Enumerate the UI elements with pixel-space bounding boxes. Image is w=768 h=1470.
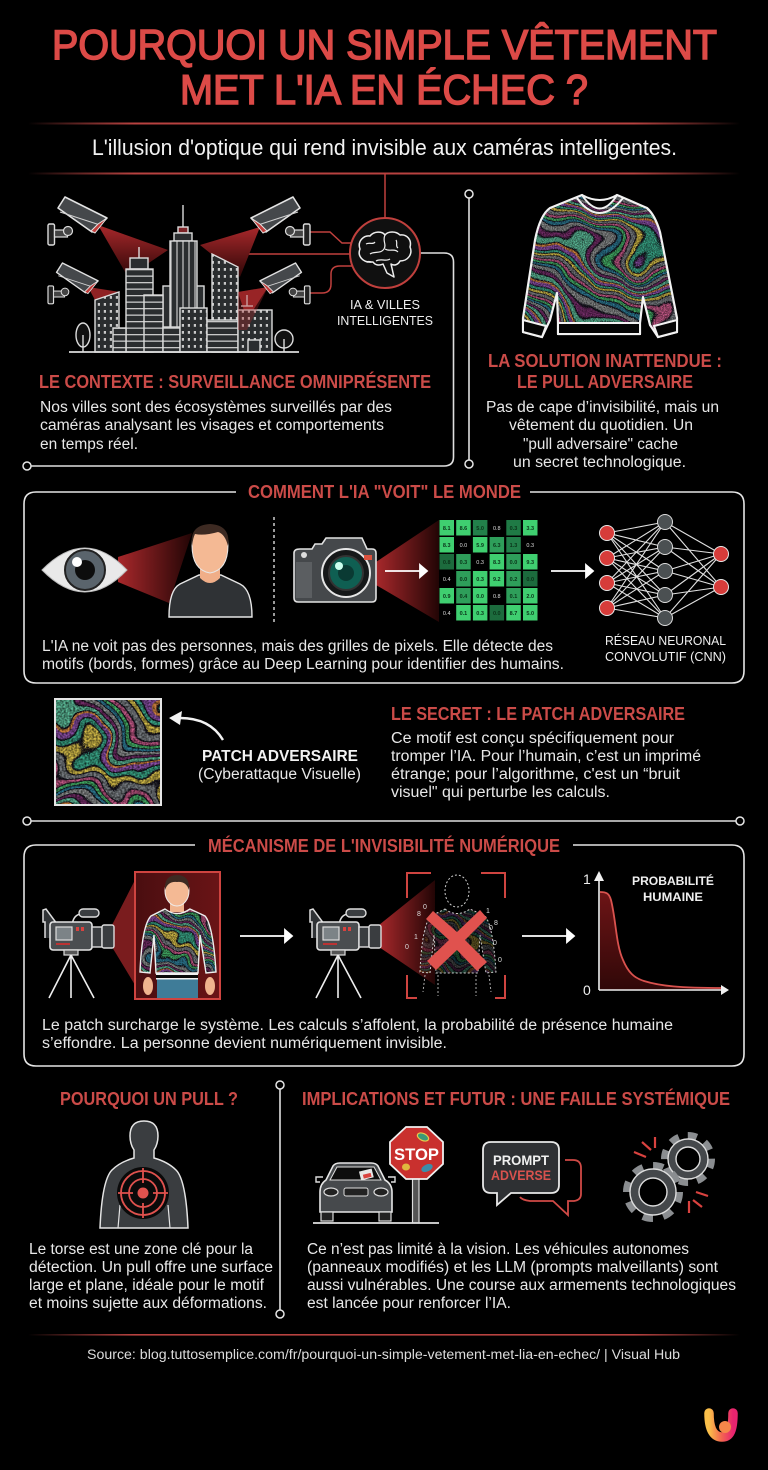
chart: pixel grid: 0.3	[476, 560, 484, 566]
source footer: Source: blog.tuttosemplice.com/fr/pourquoi-un-simple-vetement-met-lia-en-echec/ | Visual Hub	[87, 1347, 680, 1362]
chart: human probability: HUMAINE	[643, 890, 703, 904]
red connectors	[218, 173, 385, 293]
text: Ce motif est conçu spécifiquement pour	[391, 730, 674, 747]
icon: cctv bottom left	[48, 263, 98, 304]
title: POURQUOI UN SIMPLE VÊTEMENT	[52, 21, 717, 68]
chart: pixel grid: 0.4	[443, 611, 451, 617]
chart: pixel grid: 0.4	[460, 594, 468, 600]
chart: pixel grid: 5.0	[526, 611, 534, 617]
icon: cctv top right	[251, 197, 310, 245]
beam	[379, 880, 435, 985]
scene: invisible person: 1	[486, 908, 490, 915]
scene: invisible person: 0	[405, 944, 409, 951]
text: et moins sujette aux déformations.	[29, 1295, 267, 1312]
heading: COMMENT L'IA "VOIT" LE MONDE	[248, 482, 521, 502]
icon: city skyline	[69, 205, 299, 352]
chart: pixel grid: 0.2	[510, 577, 517, 583]
text: Ce n’est pas limité à la vision. Les véhicules autonomes	[307, 1241, 689, 1258]
scene: invisible person	[405, 873, 510, 998]
label: patch	[198, 748, 361, 783]
label: IA et villes intelligentes	[337, 297, 433, 328]
panel frame	[24, 492, 744, 683]
chart: pixel grid: 0.0	[476, 594, 484, 600]
camera beam	[376, 520, 439, 622]
title	[52, 21, 717, 113]
text: est lancée pour renforcer l’IA.	[307, 1295, 511, 1312]
label: CNN: CONVOLUTIF (CNN)	[605, 649, 726, 664]
arrow: curved	[169, 711, 223, 740]
chart: human probability: PROBABILITÉ	[632, 873, 714, 888]
heading: context: LE CONTEXTE : SURVEILLANCE OMNIPRÉSENTE	[39, 371, 431, 392]
heading: MÉCANISME DE L'INVISIBILITÉ NUMÉRIQUE	[208, 835, 560, 856]
text: context: Nos villes sont des écosystèmes surveillés par des	[40, 399, 392, 416]
chart: human probability: 0	[583, 982, 591, 998]
scene: invisible person: 0	[498, 957, 502, 964]
text: context: caméras analysant les visages et comportements	[40, 417, 384, 434]
text	[29, 1241, 273, 1312]
label: IA et villes intelligentes: INTELLIGENTES	[337, 313, 433, 328]
text: Le torse est une zone clé pour la	[29, 1241, 253, 1258]
text: Le patch surcharge le système. Les calculs s’affolent, la probabilité de présence humaine	[42, 1017, 673, 1034]
chart: human probability	[583, 871, 729, 998]
text: context: en temps réel.	[40, 436, 138, 453]
text: how AI sees: L'IA ne voit pas des personnes, mais des grilles de pixels. Elle détecte des	[42, 638, 553, 655]
icon: logo	[709, 1413, 733, 1437]
label: patch: PATCH ADVERSAIRE	[202, 748, 358, 765]
chart: pixel grid: 0.0	[510, 560, 517, 566]
icon: camera	[294, 538, 376, 602]
chart: pixel grid: 0.4	[443, 577, 451, 583]
chart: pixel grid: 9.2	[493, 577, 501, 583]
panel: how AI sees	[24, 482, 744, 683]
panel: secret patch	[54, 698, 700, 806]
text: aussi vulnérables. Une course aux armements technologiques	[307, 1277, 736, 1294]
chart: pixel grid: 0.0	[526, 577, 534, 583]
icon: gears	[627, 1136, 711, 1218]
divider dotted	[273, 517, 275, 625]
chart: pixel grid: 0.8	[493, 594, 501, 600]
text: solution: vêtement du quotidien. Un	[509, 417, 693, 434]
text: how AI sees: motifs (bords, formes) grâce au Deep Learning pour identifier des humains.	[42, 656, 564, 673]
label: CNN: RÉSEAU NEURONAL	[605, 633, 726, 648]
chart: pixel grid: 9.3	[526, 560, 534, 566]
chart: human probability: 1	[583, 871, 591, 887]
vertical connector	[276, 1081, 284, 1318]
arrow	[551, 565, 593, 577]
icon: prompt bubbles: ADVERSE	[491, 1167, 551, 1183]
scene: person in sweater	[134, 871, 221, 1000]
text: solution	[486, 399, 719, 471]
icon: prompt bubbles: PROMPT	[493, 1152, 549, 1168]
panel: solution	[487, 194, 720, 470]
chart: pixel grid: 0.8	[493, 526, 501, 532]
scene: invisible person: 1	[414, 934, 418, 941]
chart: pixel grid: 6.3	[493, 543, 501, 549]
subtitle: L'illusion d'optique qui rend invisible aux caméras intelligentes.	[92, 135, 677, 160]
surveillance beams	[88, 225, 268, 320]
arrow	[240, 930, 292, 942]
text	[307, 1241, 736, 1312]
text: détection. Un pull offre une surface	[29, 1259, 273, 1276]
chart: pixel grid: 2.0	[526, 594, 534, 600]
text: large et plane, idéale pour le motif	[29, 1277, 265, 1294]
text: solution: "pull adversaire" cache	[523, 436, 678, 453]
chart: pixel grid: 8.3	[493, 560, 501, 566]
chart: pixel grid	[440, 520, 538, 620]
chart: pixel grid: 5.9	[476, 543, 484, 549]
panel: why a sweater	[29, 1089, 273, 1312]
scene: invisible person: 0	[423, 904, 427, 911]
text: how AI sees	[42, 638, 564, 673]
beam	[112, 880, 135, 985]
chart: pixel grid: 8.3	[443, 543, 451, 549]
panel frame	[24, 845, 744, 1066]
chart: pixel grid: 0.3	[526, 543, 534, 549]
divider	[23, 817, 744, 825]
beam overlay on buildings	[238, 287, 268, 330]
icon: brain	[350, 218, 420, 288]
label: IA et villes intelligentes: IA & VILLES	[350, 297, 420, 312]
arrow	[385, 565, 427, 577]
scene: invisible person: 8	[417, 911, 421, 918]
connector frame	[31, 253, 454, 466]
chart: pixel grid: 8.7	[510, 611, 517, 617]
chart: pixel grid: 0.8	[443, 560, 451, 566]
label: CNN	[605, 633, 726, 664]
chart: pixel grid: 0.3	[476, 611, 484, 617]
sight beam	[118, 533, 192, 603]
chart: pixel grid: 0.3	[510, 526, 517, 532]
text: étrange; pour l’algorithme, c'est un “bruit	[391, 766, 681, 783]
scene: invisible person: 0	[489, 925, 493, 932]
chart: pixel grid: 8.1	[443, 526, 451, 532]
icon: person	[169, 524, 252, 617]
text: tromper l’IA. Pour l’humain, c’est un imprimé	[391, 748, 701, 765]
chart: pixel grid: 0.9	[443, 594, 451, 600]
chart: pixel grid: 0.1	[510, 594, 517, 600]
icon: cctv top left	[48, 197, 107, 245]
heading: POURQUOI UN PULL ?	[60, 1089, 238, 1109]
chart: pixel grid: 0.0	[493, 611, 501, 617]
text: (panneaux modifiés) et les LLM (prompts malveillants) sont	[307, 1259, 719, 1276]
arrow	[522, 930, 574, 942]
text: visuel" qui perturbe les calculs.	[391, 784, 610, 801]
heading: IMPLICATIONS ET FUTUR : UNE FAILLE SYSTÉMIQUE	[302, 1088, 730, 1109]
icon: video camera	[43, 909, 114, 998]
text	[391, 730, 701, 801]
icon: red cross	[426, 910, 487, 971]
icon: cctv bottom right	[260, 263, 310, 304]
chart: pixel grid: 3.3	[526, 526, 534, 532]
icon: car and stop sign	[313, 1127, 443, 1223]
icon: video camera	[310, 909, 381, 998]
chart: pixel grid: 0.1	[460, 611, 467, 617]
scene: invisible person: 0	[493, 940, 497, 947]
panel: context	[23, 173, 454, 470]
panel: mechanism	[24, 835, 744, 1066]
chart: neural network	[600, 514, 728, 626]
chart: pixel grid: 0.3	[476, 577, 484, 583]
icon: car and stop sign: STOP	[394, 1145, 439, 1164]
heading: solution	[488, 351, 722, 392]
icon: eye	[42, 548, 127, 592]
text: solution: un secret technologique.	[513, 454, 686, 471]
heading: solution: LE PULL ADVERSAIRE	[517, 372, 693, 392]
icon: adversarial sweater	[522, 194, 678, 338]
vertical connector	[465, 190, 473, 468]
chart: pixel grid: 0.0	[460, 577, 467, 583]
heading: solution: LA SOLUTION INATTENDUE :	[488, 351, 722, 371]
patch swatch	[54, 698, 162, 806]
text: s’effondre. La personne devient numériquement invisible.	[42, 1035, 447, 1052]
chart: pixel grid: 0.3	[460, 560, 467, 566]
chart: pixel grid: 1.3	[510, 543, 517, 549]
icon: prompt bubbles	[483, 1142, 581, 1215]
text: context	[40, 399, 392, 453]
chart: pixel grid: 5.0	[476, 526, 484, 532]
scene: invisible person: 8	[494, 920, 498, 927]
text	[42, 1017, 673, 1052]
label: patch: (Cyberattaque Visuelle)	[198, 766, 361, 783]
text: solution: Pas de cape d’invisibilité, mais un	[486, 399, 719, 416]
chart: pixel grid: 0.0	[460, 543, 467, 549]
heading: LE SECRET : LE PATCH ADVERSAIRE	[391, 704, 685, 724]
icon: torso target	[100, 1121, 188, 1228]
title: MET L'IA EN ÉCHEC ?	[180, 66, 588, 113]
panel: implications	[302, 1088, 736, 1312]
chart: pixel grid: 8.6	[460, 526, 467, 532]
